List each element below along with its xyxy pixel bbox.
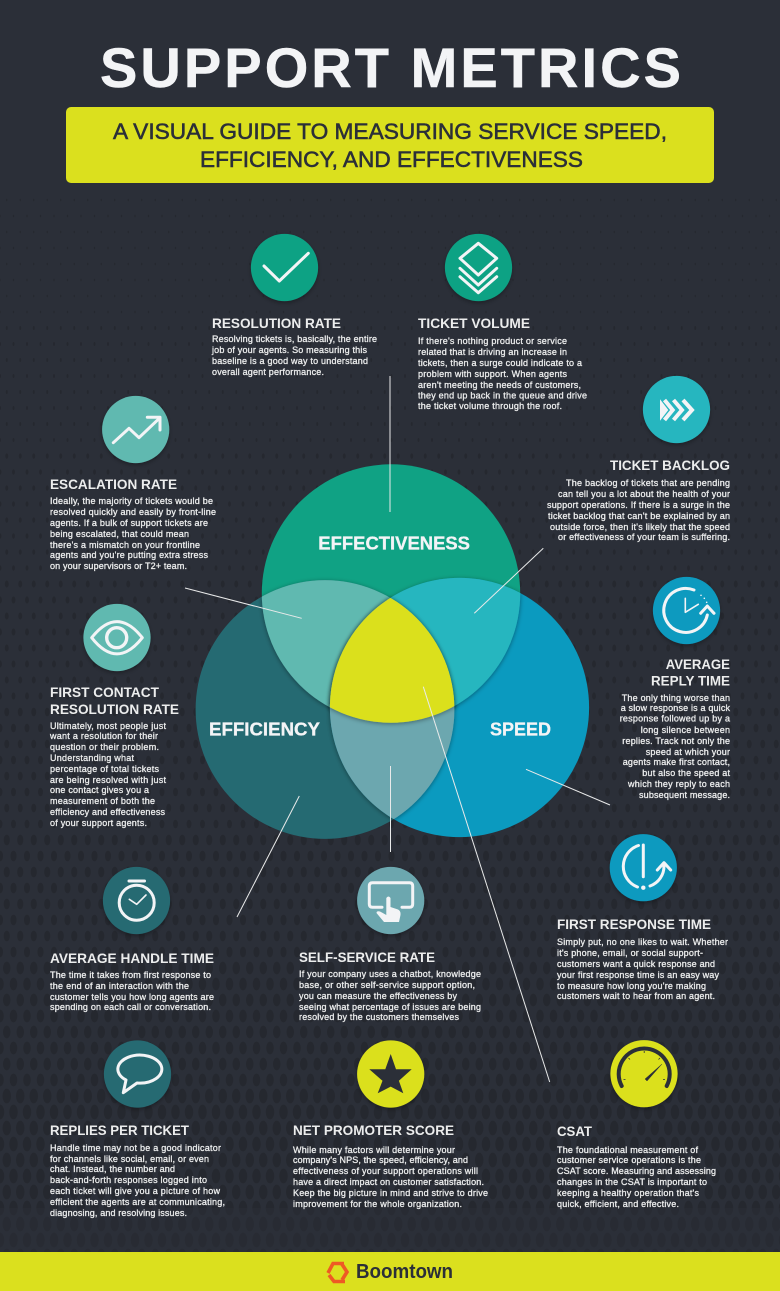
description: customer service operations is the <box>557 1155 701 1165</box>
heading: ESCALATION RATE <box>50 477 177 492</box>
heading <box>50 685 179 717</box>
description: tickets, then a surge could indicate to a <box>418 358 582 368</box>
description <box>557 937 728 1001</box>
description: baseline is a good way to understand <box>212 356 368 366</box>
description: which they reply to each <box>627 779 730 789</box>
footer bar <box>0 1252 780 1291</box>
description: outside force, then it's likely that the speed <box>550 522 730 532</box>
description: company's NPS, the speed, efficiency, and <box>293 1155 468 1165</box>
description: subsequent message. <box>639 790 730 800</box>
icon: star <box>357 1040 424 1108</box>
description: agents and you're putting extra stress <box>50 550 208 560</box>
description: If there's nothing product or service <box>418 336 567 346</box>
metric: average reply time <box>620 577 730 800</box>
description <box>620 693 730 800</box>
heading: AVERAGE <box>666 657 730 672</box>
icon: gauge <box>610 1040 678 1107</box>
description: for channels like social, email, or even <box>50 1154 209 1164</box>
metric: replies per ticket <box>50 1040 225 1218</box>
metric: resolution rate <box>211 234 377 377</box>
description: The time it takes from first response to <box>50 970 211 980</box>
description: back-and-forth responses logged into <box>50 1175 207 1185</box>
description <box>50 496 216 571</box>
metric: self-service rate <box>299 867 481 1022</box>
description: Handle time may not be a good indicator <box>50 1143 221 1153</box>
description: your first response time is an easy way <box>557 970 720 980</box>
icon: forward chevrons <box>643 376 710 443</box>
description: customer tells you how long agents are <box>50 992 214 1002</box>
description: chat. Instead, the number and <box>50 1164 175 1174</box>
description: percentage of total tickets <box>50 764 160 774</box>
description: related that is driving an increase in <box>418 347 567 357</box>
description: support operations. If there is a surge in the <box>547 500 730 510</box>
description: problem with support. When agents <box>418 369 568 379</box>
description: Keep the big picture in mind and strive to drive <box>293 1188 488 1198</box>
description: replies. Track not only the <box>622 736 730 746</box>
description: want a resolution for their <box>49 731 158 741</box>
description: you can measure the effectiveness by <box>299 991 458 1001</box>
description: base, or other self-service support option, <box>299 980 475 990</box>
description <box>299 969 481 1022</box>
description: The foundational measurement of <box>557 1145 698 1155</box>
description: The only thing worse than <box>622 693 730 703</box>
description: can tell you a lot about the health of your <box>558 489 730 499</box>
description: response followed up by a <box>620 714 730 724</box>
description <box>293 1145 488 1209</box>
metric: average handle time <box>50 867 214 1012</box>
description: changes in the CSAT is important to <box>557 1177 707 1187</box>
description: being escalated, that could mean <box>50 529 189 539</box>
description: resolved quickly and easily by front-line <box>50 507 216 517</box>
description: resolved by the customers themselves <box>299 1012 460 1022</box>
description <box>49 721 166 828</box>
description: Simply put, no one likes to wait. Whether <box>557 937 728 947</box>
description: Resolving tickets is, basically, the entire <box>212 334 377 344</box>
description: The backlog of tickets that are pending <box>566 478 730 488</box>
subtitle banner: A VISUAL GUIDE TO MEASURING SERVICE SPEED, <box>113 119 667 144</box>
description: If your company uses a chatbot, knowledge <box>299 969 481 979</box>
description: there's a mismatch on your frontline <box>50 540 200 550</box>
description: one contact gives you a <box>50 785 149 795</box>
description: are being resolved with just <box>50 775 166 785</box>
description <box>50 1143 225 1218</box>
description: customers wait to hear from an agent. <box>557 991 715 1001</box>
icon: stacked layers <box>445 234 512 301</box>
description: agents make first contact, <box>623 757 730 767</box>
description: spending on each call or conversation. <box>50 1002 211 1012</box>
description: of your support agents. <box>50 818 147 828</box>
heading: FIRST CONTACT <box>50 685 160 700</box>
metric: ticket backlog <box>547 376 730 542</box>
icon: boomtown logo <box>328 1264 347 1282</box>
metric: csat <box>557 1040 716 1209</box>
description: each ticket will give you a picture of how <box>50 1186 220 1196</box>
heading: RESOLUTION RATE <box>212 316 341 331</box>
metric: escalation rate <box>50 396 216 571</box>
description: efficiency and effectiveness <box>50 807 166 817</box>
icon: speech bubble <box>104 1040 171 1108</box>
description: Understanding what <box>50 753 134 763</box>
heading: TICKET BACKLOG <box>610 458 730 473</box>
description <box>547 478 730 542</box>
description: keeping a healthy operation that's <box>557 1188 700 1198</box>
description: to measure how long you're making <box>557 981 706 991</box>
description: long silence between <box>641 725 730 735</box>
metric: first contact resolution rate <box>49 604 179 828</box>
description: a slow response is a quick <box>621 703 730 713</box>
metric: first response time <box>557 834 728 1001</box>
logo wordmark: Boomtown <box>356 1260 453 1283</box>
description: or effectiveness of your team is suffering. <box>558 532 730 542</box>
description: While many factors will determine your <box>293 1145 455 1155</box>
heading: AVERAGE HANDLE TIME <box>50 951 214 966</box>
title: SUPPORT METRICS <box>100 36 681 99</box>
icon: clock with arrow <box>653 577 720 644</box>
description: on your supervisors or T2+ team. <box>50 561 187 571</box>
venn label: efficiency: EFFICIENCY <box>209 720 320 740</box>
venn label: effectiveness: EFFECTIVENESS <box>318 533 470 553</box>
metric: net promoter score <box>293 1040 488 1209</box>
description <box>418 336 587 411</box>
description: agents. If a bulk of support tickets are <box>50 518 208 528</box>
description: have a direct impact on customer satisfaction. <box>293 1177 484 1187</box>
description <box>557 1145 716 1209</box>
description: Ideally, the majority of tickets would be <box>50 496 213 506</box>
description: question or their problem. <box>50 742 159 752</box>
heading: CSAT <box>557 1124 593 1139</box>
description: they end up back in the queue and drive <box>418 390 587 400</box>
description: Ultimately, most people just <box>50 721 166 731</box>
description: CSAT score. Measuring and assessing <box>557 1166 716 1176</box>
connector lines <box>185 376 610 1082</box>
description: overall agent performance. <box>212 367 324 377</box>
icon: checkmark <box>251 234 318 301</box>
heading: TICKET VOLUME <box>418 316 530 331</box>
heading: RESOLUTION RATE <box>50 702 179 717</box>
description: but also the speed at <box>642 768 730 778</box>
description: the end of an interaction with the <box>50 981 189 991</box>
description: it's phone, email, or social support- <box>557 948 703 958</box>
heading: REPLIES PER TICKET <box>50 1123 190 1138</box>
description: diagnosing, and resolving issues. <box>50 1208 187 1218</box>
description <box>211 334 377 377</box>
icon: rising arrow <box>102 396 169 463</box>
heading: FIRST RESPONSE TIME <box>557 917 711 932</box>
subtitle banner: EFFICIENCY, AND EFFECTIVENESS <box>200 147 583 172</box>
heading: REPLY TIME <box>651 674 730 689</box>
heading <box>651 657 730 689</box>
subtitle banner <box>66 107 714 183</box>
description: improvement for the whole organization. <box>293 1199 462 1209</box>
description: aren't meeting the needs of customers, <box>418 380 581 390</box>
description: ticket backlog that can't be explained by an <box>548 511 730 521</box>
venn label: speed: SPEED <box>490 720 551 740</box>
description: job of your agents. So measuring this <box>211 345 368 355</box>
icon: exclamation with arrow <box>610 834 677 901</box>
venn diagram <box>196 464 589 839</box>
description: the ticket volume through the roof. <box>418 401 562 411</box>
description: efficient the agents are at communicating, <box>50 1197 225 1207</box>
icon: eye <box>83 604 151 671</box>
icon: stopwatch <box>103 867 170 934</box>
description: seeing what percentage of issues are being <box>299 1002 481 1012</box>
metric: ticket volume <box>418 234 587 411</box>
description: speed at which your <box>646 747 730 757</box>
description <box>50 970 214 1012</box>
description: quick, efficient, and effective. <box>557 1199 679 1209</box>
heading: NET PROMOTER SCORE <box>293 1123 454 1138</box>
description: measurement of both the <box>50 796 155 806</box>
icon: touch screen <box>357 867 424 934</box>
description: effectiveness of your support operations will <box>293 1166 478 1176</box>
description: customers want a quick response and <box>557 959 715 969</box>
heading: SELF-SERVICE RATE <box>299 950 435 965</box>
